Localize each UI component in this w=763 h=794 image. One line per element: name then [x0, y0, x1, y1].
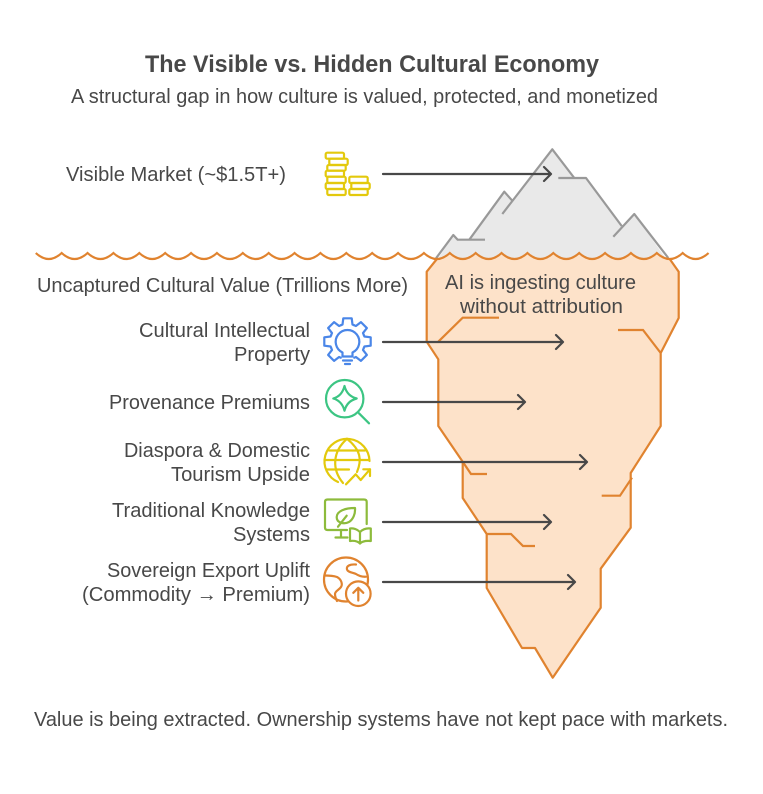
label: provenance premiums: Provenance Premiums — [109, 392, 310, 414]
callout: AI ingesting culture: AI is ingesting culture — [445, 272, 636, 294]
callout: AI ingesting culture — [445, 272, 636, 318]
icon: monitor with leaf and book — [325, 500, 371, 544]
icon: globe with upload arrow — [324, 558, 371, 606]
arrow: sovereign export — [383, 575, 575, 589]
label: sovereign export uplift — [82, 560, 310, 606]
callout: AI ingesting culture: without attribution — [459, 296, 623, 318]
title: The Visible vs. Hidden Cultural Economy — [145, 51, 600, 78]
iceberg above water — [436, 149, 668, 262]
icon: globe with trend arrow — [324, 439, 370, 484]
icon: coin stacks — [326, 153, 370, 195]
label: cultural intellectual property: Property — [234, 344, 310, 366]
label: traditional knowledge systems: Traditional Knowledge — [112, 500, 310, 522]
label: cultural intellectual property: Cultural Intellectual — [139, 320, 310, 342]
footer statement: Value is being extracted. Ownership systems have not kept pace with markets. — [34, 709, 728, 731]
arrow: cultural intellectual property — [383, 335, 563, 349]
label: sovereign export uplift: (Commodity → Premium) — [82, 584, 310, 606]
icon: gear with light bulb — [324, 318, 371, 364]
arrow: visible market — [383, 167, 551, 181]
label: sovereign export uplift: Sovereign Export Uplift — [107, 560, 310, 582]
icon: magnifier with sparkle — [326, 380, 369, 423]
arrow: traditional knowledge — [383, 515, 551, 529]
arrow: diaspora tourism — [383, 455, 587, 469]
label: diaspora and domestic tourism upside — [124, 440, 310, 486]
label: traditional knowledge systems — [112, 500, 310, 546]
subtitle: A structural gap in how culture is valued, protected, and monetized — [71, 86, 658, 108]
label: uncaptured cultural value: Uncaptured Cultural Value (Trillions More) — [37, 275, 408, 297]
label: diaspora and domestic tourism upside: Tourism Upside — [171, 464, 310, 486]
arrow: provenance premiums — [383, 395, 525, 409]
label: visible market: Visible Market (~$1.5T+) — [66, 164, 286, 186]
iceberg below water — [427, 253, 679, 678]
water line — [36, 253, 709, 259]
label: cultural intellectual property — [139, 320, 310, 366]
label: traditional knowledge systems: Systems — [233, 524, 310, 546]
label: diaspora and domestic tourism upside: Diaspora & Domestic — [124, 440, 310, 462]
